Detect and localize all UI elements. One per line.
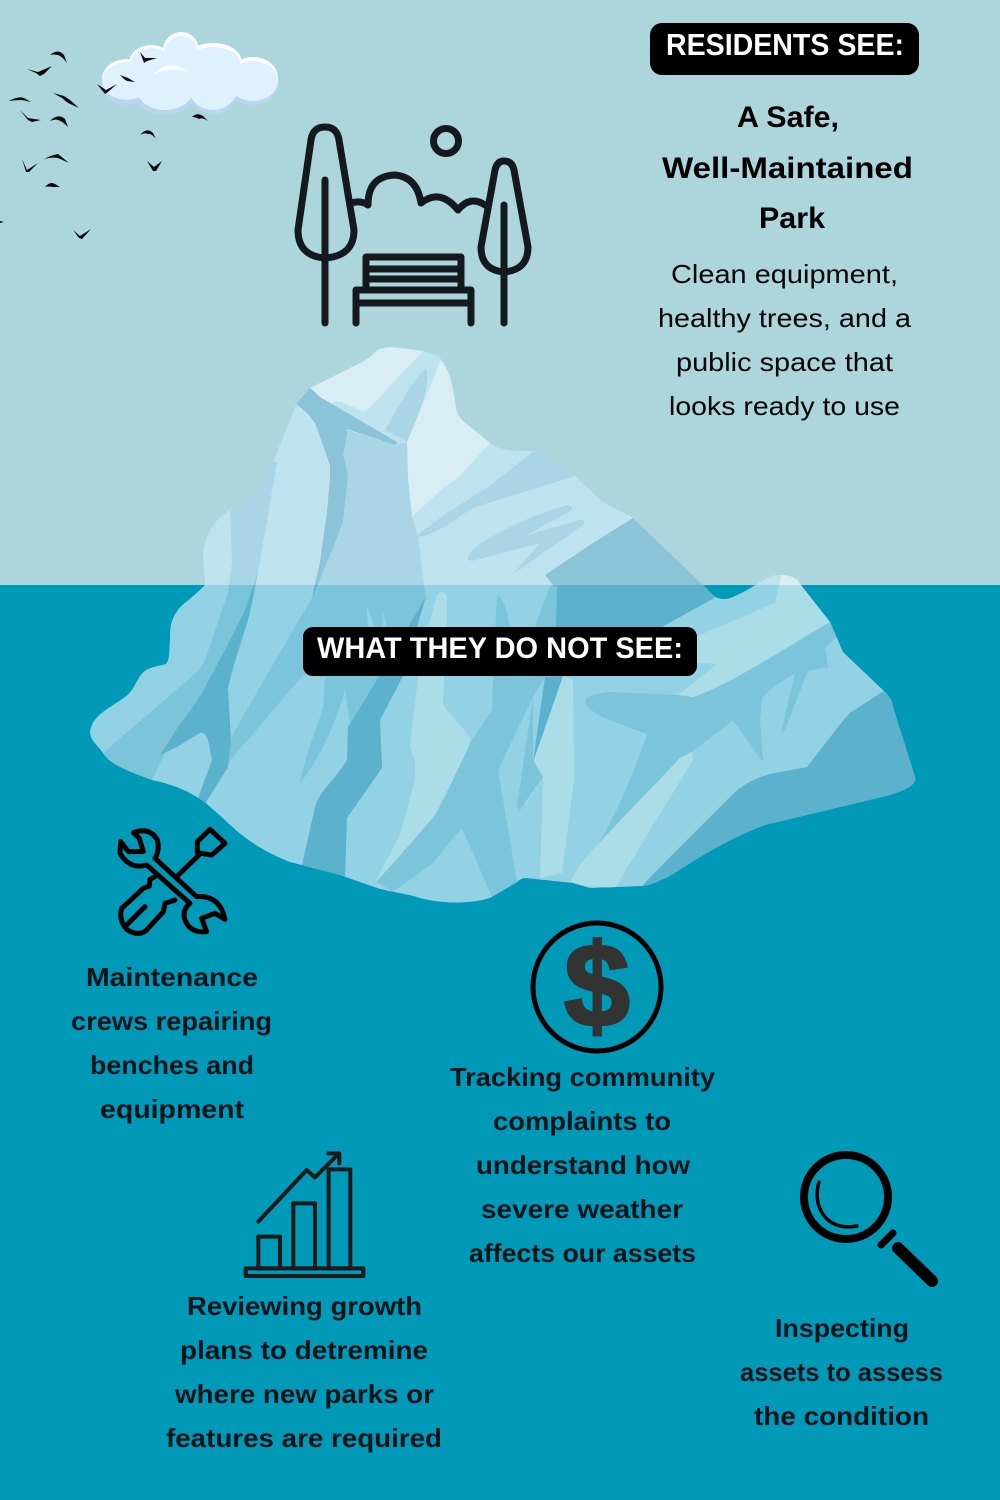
- text: tracking community complaints: severe weather: [481, 1194, 683, 1224]
- icon: dollar sign in circle: $: [564, 920, 630, 1052]
- illustration: cloud: [102, 32, 279, 115]
- text: tracking community complaints: understand how: [476, 1150, 691, 1180]
- text: inspecting assets: Inspecting: [775, 1313, 909, 1343]
- text: maintenance crews: benches and: [90, 1050, 254, 1080]
- text: reviewing growth plans: features are required: [166, 1423, 442, 1453]
- icon: wrench and screwdriver: [120, 829, 225, 933]
- water background: [0, 585, 1000, 1500]
- heading: a safe, well-maintained park: A Safe,: [737, 101, 839, 134]
- icon: dollar sign in circle: [533, 920, 661, 1052]
- text: tracking community complaints: affects our assets: [469, 1238, 696, 1268]
- text: inspecting assets: [740, 1313, 943, 1431]
- text: residents description: public space that: [676, 347, 894, 377]
- text: tracking community complaints: complaints to: [493, 1106, 671, 1136]
- sky background: [0, 0, 1000, 585]
- text: inspecting assets: the condition: [754, 1401, 929, 1431]
- text: maintenance crews: [71, 962, 272, 1124]
- text: reviewing growth plans: Reviewing growth: [187, 1291, 422, 1321]
- text: inspecting assets: assets to assess: [740, 1357, 943, 1387]
- text: residents description: looks ready to use: [669, 391, 900, 421]
- heading: a safe, well-maintained park: Park: [759, 202, 825, 235]
- text: reviewing growth plans: [166, 1291, 442, 1453]
- text: maintenance crews: equipment: [100, 1094, 244, 1124]
- text: maintenance crews: Maintenance: [86, 962, 258, 992]
- text: tracking community complaints: Tracking community: [450, 1062, 716, 1092]
- heading: a safe, well-maintained park: [662, 101, 913, 235]
- text: maintenance crews: crews repairing: [71, 1006, 272, 1036]
- illustration: flock of birds: [0, 52, 208, 239]
- icon: magnifying glass: [804, 1155, 932, 1281]
- text: residents description: [658, 259, 912, 421]
- badge: what they do not see: WHAT THEY DO NOT SEE:: [317, 632, 683, 665]
- text: residents description: healthy trees, and a: [658, 303, 912, 333]
- heading: a safe, well-maintained park: Well-Maintained: [662, 152, 913, 185]
- badge: what they do not see: [303, 627, 697, 676]
- icon: park bench with trees: [298, 127, 528, 323]
- badge: residents see: RESIDENTS SEE:: [666, 27, 904, 62]
- icon: growth bar chart: [246, 1153, 363, 1276]
- text: reviewing growth plans: where new parks or: [174, 1379, 434, 1409]
- text: reviewing growth plans: plans to detremine: [180, 1335, 428, 1365]
- text: residents description: Clean equipment,: [671, 259, 898, 289]
- badge: residents see: [650, 23, 919, 75]
- illustration: iceberg: [90, 345, 920, 903]
- text: tracking community complaints: [450, 1062, 716, 1268]
